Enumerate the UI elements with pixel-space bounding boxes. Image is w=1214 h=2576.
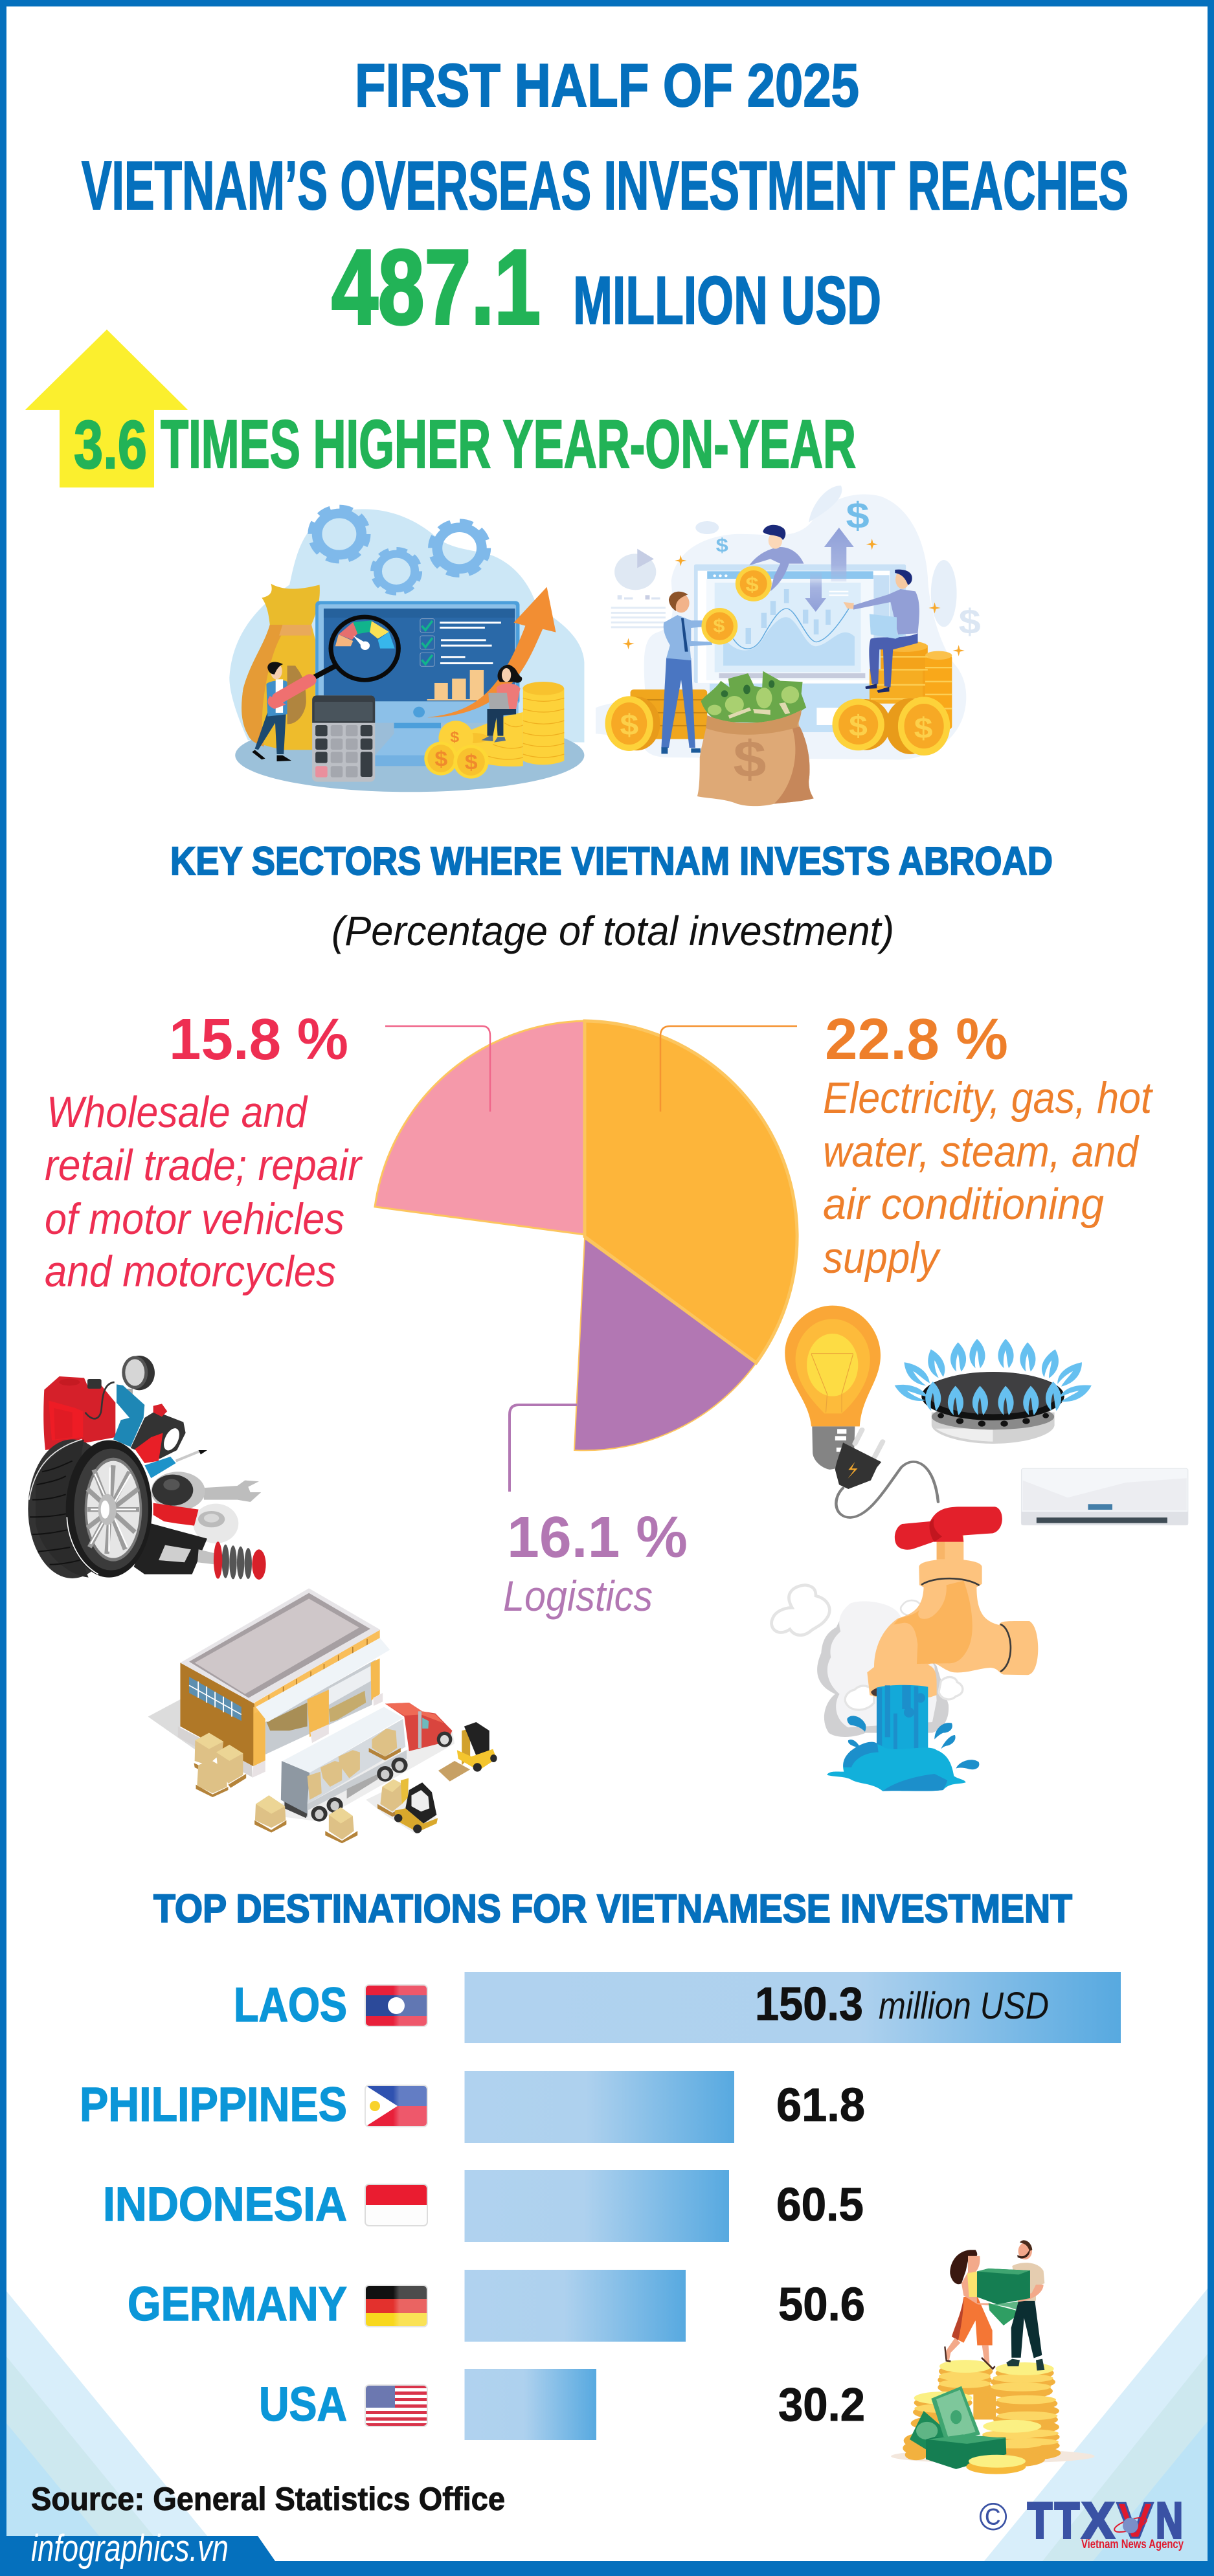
dollar symbols: $ [846,495,870,536]
dollar symbols [716,495,981,642]
label: logistics [503,1505,688,1620]
logo: TTXVN: N [1156,2492,1183,2549]
row: USA [259,2369,865,2440]
description: retail trade; repair [45,1141,363,1190]
row: USA: 30.2 [778,2379,865,2431]
row: Germany: 50.6 [778,2279,865,2331]
label: wholesale and retail [45,1007,363,1296]
dollar symbols: $ [716,535,728,556]
row: Germany [128,2270,865,2342]
growth caption: TIMES HIGHER YEAR-ON-YEAR [161,407,856,482]
leader line: logistics [510,1405,577,1492]
pie slice: wholesale and retail [375,1021,585,1235]
logo: TTXVN: T [1028,2492,1052,2549]
description: Logistics [503,1572,653,1620]
bar chart: destinations [80,1972,1121,2440]
row: Laos: LAOS [234,1978,347,2032]
pie slice: logistics [574,1238,756,1450]
description [823,1073,1154,1282]
row: Philippines: 61.8 [776,2079,865,2131]
illustration: warehouse, truck and forklifts [148,1588,497,1843]
row: Indonesia: 60.5 [776,2179,864,2231]
leader line: wholesale [385,1026,490,1112]
illustration: air conditioner [1022,1468,1188,1525]
logo: TTXVN: V [1117,2492,1153,2549]
percent value: 22.8 % [825,1007,1008,1072]
illustration: tire, fuel can and car parts [28,1356,266,1580]
description: supply [823,1233,941,1282]
section heading: key sectors: KEY SECTORS WHERE VIETNAM INVESTS ABROAD [170,839,1053,883]
illustration: investors with coins and money bag [596,486,981,806]
row: USA: USA [259,2377,347,2431]
coin symbols: $ [849,710,868,743]
row: Philippines: PHILIPPINES [80,2078,347,2131]
row: Laos [234,1972,1121,2043]
decorative background corner: right [984,2289,1208,2561]
row: Indonesia: INDONESIA [103,2177,347,2231]
description: of motor vehicles [45,1194,344,1244]
logo: TTXVN: Vietnam News Agency [1081,2538,1184,2551]
icon: yellow up arrow [25,330,188,487]
coin symbols: $ [746,573,759,596]
logo: TTXVN: © [979,2495,1007,2538]
header panel [25,51,1129,487]
coin symbols: $ [434,747,447,771]
description: water, steam, and [823,1127,1140,1176]
description [45,1088,363,1296]
illustration: couple on coin stacks [891,2240,1095,2474]
title line 1: FIRST HALF OF 2025 [355,51,859,119]
decorative background corner: left [6,2291,207,2536]
section subtitle: (Percentage of total investment) [332,908,894,954]
illustration: gas burner [891,1339,1096,1444]
coin symbols [434,729,478,774]
description: air conditioning [823,1180,1104,1229]
pie chart [375,1021,797,1450]
dollar symbols: $ [959,603,981,642]
illustration: analytics monitor and gears [229,507,584,792]
bag symbol: $ [733,730,766,789]
label: electricity [823,1007,1154,1282]
coin symbols: $ [465,751,478,774]
coin symbols: $ [450,729,460,746]
source credit: Source: General Statistics Office [31,2481,505,2517]
brand tab: infographics.vn: infographics.vn [31,2527,229,2570]
row: Laos: million USD [879,1985,1049,2027]
leader line: electricity [660,1026,797,1112]
description: and motorcycles [45,1247,336,1296]
percent value: 16.1 % [507,1505,688,1570]
row: Laos: 150.3 [755,1978,863,2030]
logo: TTXVN: X [1082,2492,1114,2549]
headline unit: MILLION USD [573,263,881,339]
headline number: 487.1 [332,228,541,346]
section heading: top destinations: TOP DESTINATIONS FOR VIETNAMESE INVESTMENT [153,1887,1072,1931]
coin symbols: $ [713,616,725,636]
growth multiple: 3.6 [74,407,147,483]
coin symbols: $ [620,709,638,741]
coin symbols: $ [914,712,933,745]
illustration: water tap with steam [772,1506,1038,1791]
row: Germany: GERMANY [128,2277,347,2331]
logo: TTXVN: T [1055,2492,1079,2549]
illustration: light bulb and plug [785,1306,938,1518]
description: Electricity, gas, hot [823,1073,1154,1123]
row: Philippines [80,2071,865,2143]
description: Wholesale and [47,1088,308,1137]
pie slice: electricity, gas [585,1021,797,1363]
row: Indonesia [103,2170,864,2242]
logo: TTXVN [979,2492,1184,2551]
coin symbols [620,573,933,745]
percent value: 15.8 % [169,1007,348,1072]
